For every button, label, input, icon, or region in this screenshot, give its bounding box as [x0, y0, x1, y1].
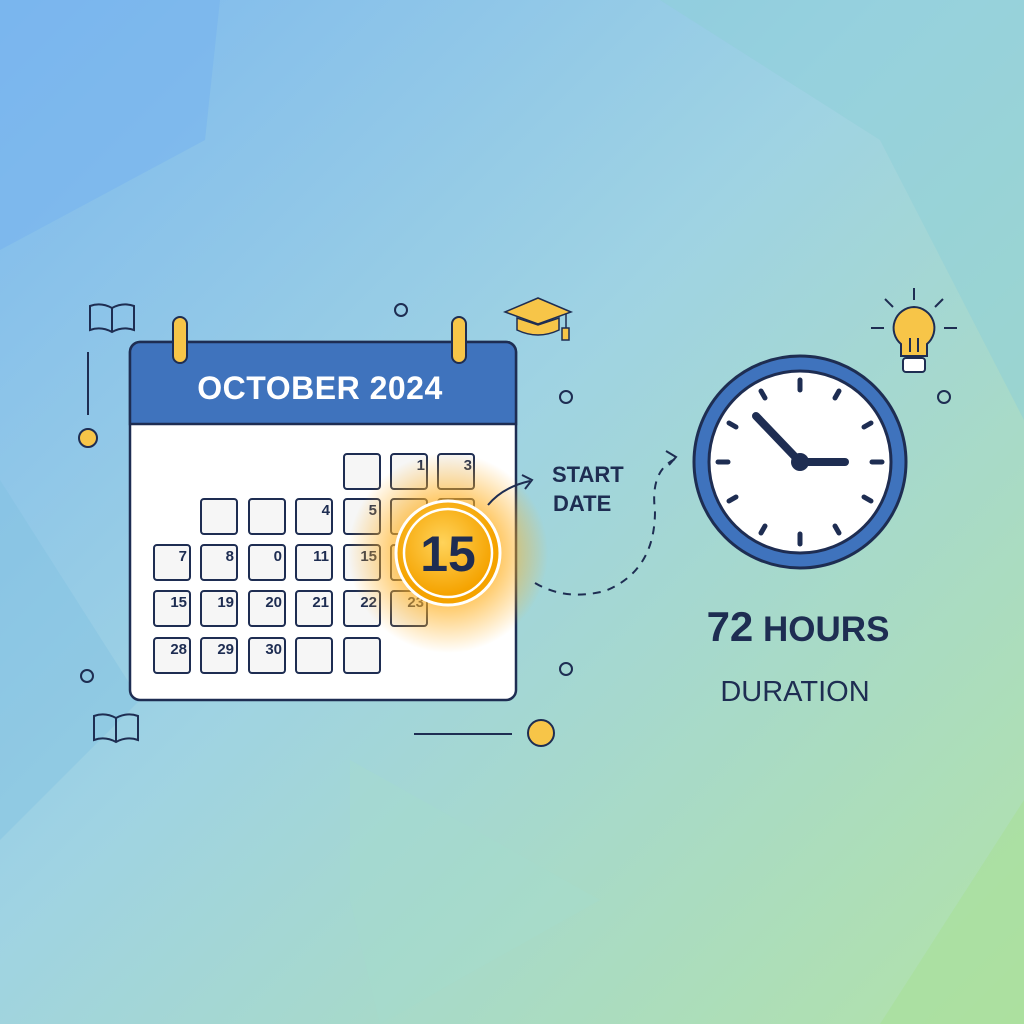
calendar grid: 19: [217, 594, 234, 611]
calendar grid: 28: [170, 641, 187, 658]
calendar grid: 15: [170, 594, 187, 611]
calendar grid: 8: [226, 548, 234, 565]
highlight badge: 15: [348, 453, 548, 653]
decorative line and dot left: [79, 352, 97, 447]
calendar grid: 0: [274, 548, 282, 565]
start date label: START: [552, 462, 624, 487]
calendar grid: 22: [360, 594, 377, 611]
calendar grid: 23: [407, 594, 424, 611]
start date label: DATE: [553, 491, 611, 516]
icon: light bulb: [871, 288, 957, 372]
duration label: DURATION: [720, 676, 870, 708]
calendar grid: 4: [322, 502, 331, 519]
decorative icon: book top-left: [90, 304, 134, 332]
calendar grid: 29: [217, 641, 234, 658]
decorative icon: book bottom-left: [94, 714, 138, 742]
decorative circles: [81, 304, 950, 682]
clock hands: [756, 416, 845, 471]
calendar grid: 1: [417, 457, 425, 474]
clock: [694, 356, 906, 568]
start date label: [552, 462, 624, 516]
calendar grid: 21: [312, 594, 329, 611]
calendar rings: [173, 317, 466, 363]
calendar grid: 5: [369, 502, 377, 519]
calendar grid: 11: [313, 548, 329, 565]
decorative line with dot bottom: [414, 720, 554, 746]
icon: graduation cap: [505, 298, 571, 340]
calendar grid: 3: [464, 457, 472, 474]
calendar grid: 20: [265, 594, 282, 611]
calendar grid: 15: [360, 548, 377, 565]
calendar title: OCTOBER 2024: [197, 370, 443, 406]
calendar grid: [154, 454, 474, 673]
duration value: 72 HOURS: [707, 603, 889, 650]
highlight badge: 15: 15: [420, 526, 476, 582]
calendar grid: 7: [179, 548, 187, 565]
calendar grid: 30: [265, 641, 282, 658]
calendar: [130, 317, 516, 700]
dashed arrow to clock: [535, 451, 676, 595]
arrow: badge to start date: [488, 475, 532, 505]
